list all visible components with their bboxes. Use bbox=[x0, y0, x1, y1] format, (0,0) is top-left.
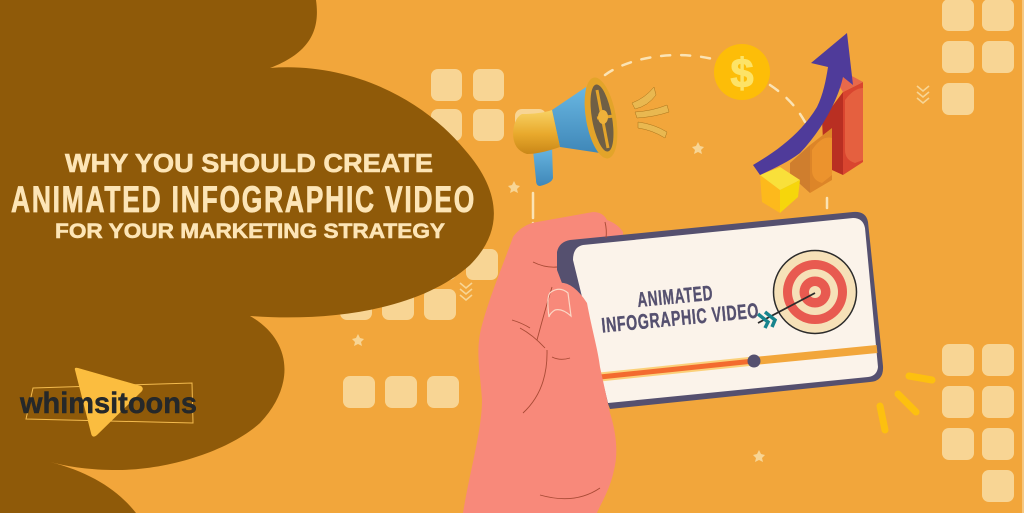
title: WHY YOU SHOULD CREATE bbox=[65, 148, 433, 178]
logo: whimsitoons bbox=[19, 368, 197, 437]
logo: whimsitoons: whimsitoons bbox=[19, 387, 197, 420]
title: FOR YOUR MARKETING STRATEGY bbox=[55, 219, 445, 243]
tile grid: upper centre bbox=[431, 69, 546, 141]
tile grid: lower centre bbox=[340, 249, 498, 408]
dashed arc connector bbox=[533, 55, 827, 227]
progress bar bbox=[600, 349, 877, 377]
title: ANIMATED INFOGRAPHIC VIDEO bbox=[11, 179, 476, 220]
title bbox=[11, 148, 476, 243]
icon: dollar coin bbox=[714, 44, 770, 100]
screen title bbox=[598, 278, 760, 338]
brown blob panel bbox=[0, 0, 494, 513]
icon: megaphone bbox=[513, 75, 623, 186]
tile grid: bottom right bbox=[942, 344, 1014, 502]
chart: isometric bars bbox=[760, 75, 863, 213]
phone with video player bbox=[557, 212, 883, 409]
icon: sound waves bbox=[632, 87, 669, 138]
chevrons: lower centre bbox=[460, 283, 472, 300]
hand: palm and thumb in front of phone bbox=[463, 222, 616, 513]
decorative stars bbox=[352, 142, 765, 462]
target icon bbox=[758, 250, 856, 334]
icon: growth arrow bbox=[753, 33, 853, 175]
icon: dollar coin: $ bbox=[731, 50, 754, 96]
hand: fingers behind phone bbox=[513, 212, 623, 300]
screen title: ANIMATED bbox=[636, 282, 714, 312]
yellow spark rays bbox=[880, 376, 932, 430]
screen title: INFOGRAPHIC VIDEO bbox=[601, 300, 760, 338]
chevrons: top right bbox=[917, 86, 929, 103]
tile grid: top right bbox=[942, 0, 1014, 115]
